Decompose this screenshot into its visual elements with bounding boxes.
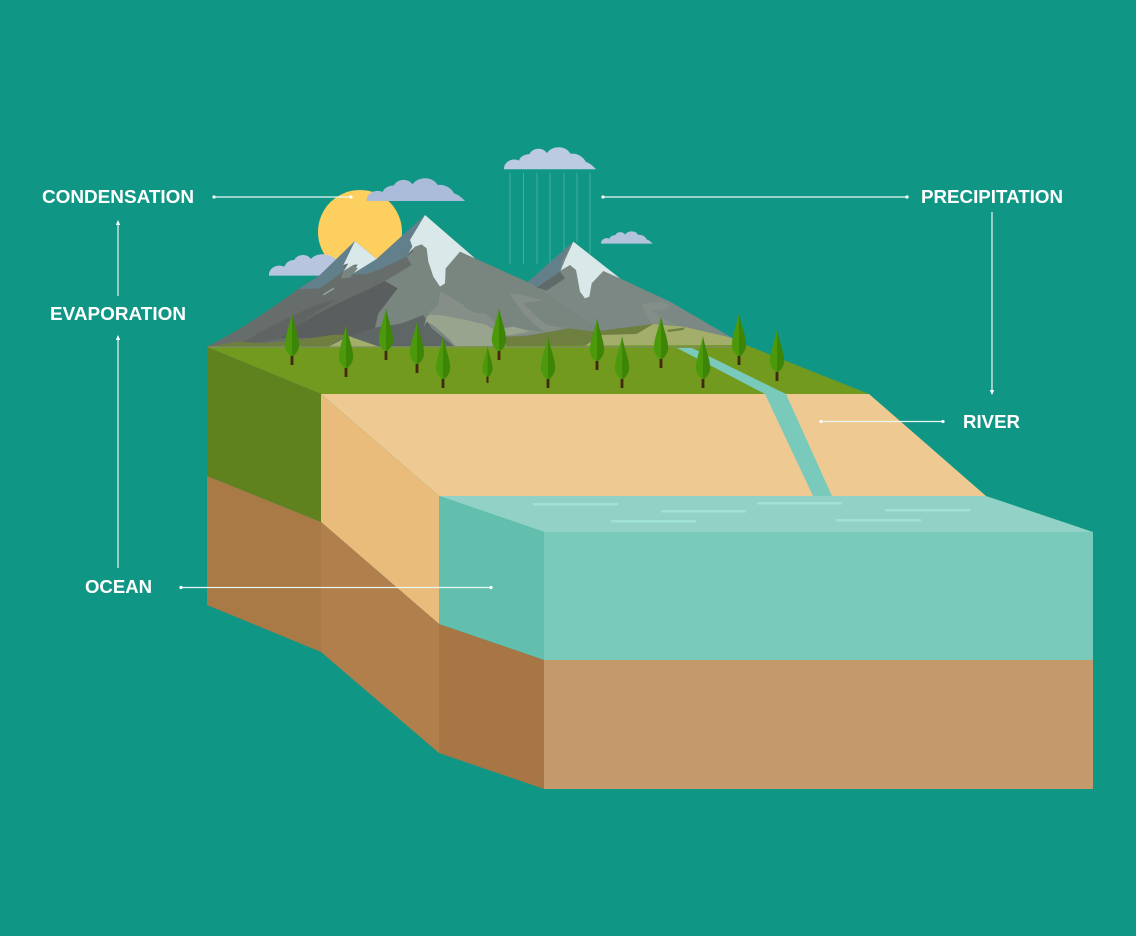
sand top bbox=[321, 394, 986, 496]
soil front face bbox=[544, 660, 1093, 789]
mountain: lighter slopes bbox=[424, 292, 567, 347]
sun bbox=[318, 190, 402, 274]
water front face bbox=[544, 532, 1093, 660]
soil lower left face bbox=[439, 624, 544, 789]
trees bbox=[285, 308, 784, 388]
grass top bbox=[207, 345, 869, 394]
soil left face bbox=[207, 476, 321, 652]
label: evaporation: EVAPORATION bbox=[50, 304, 186, 324]
cloud: small right bbox=[601, 231, 653, 244]
label: ocean: OCEAN bbox=[85, 577, 152, 597]
grass horizon line bbox=[207, 346, 735, 348]
soil middle face bbox=[321, 522, 439, 753]
rain lines bbox=[510, 173, 590, 264]
leader line: condensation bbox=[212, 195, 353, 199]
grass left face bbox=[207, 347, 321, 522]
mountain: back right bbox=[520, 242, 747, 347]
mountain: main massif bbox=[207, 215, 618, 347]
label: condensation: CONDENSATION bbox=[42, 187, 194, 207]
cloud: near sun bbox=[367, 178, 465, 201]
foothills bbox=[212, 324, 750, 347]
cloud: rain cloud bbox=[504, 147, 596, 169]
label: river: RIVER bbox=[963, 412, 1020, 432]
label: precipitation: PRECIPITATION bbox=[921, 187, 1063, 207]
arrow: evaporation to condensation bbox=[116, 220, 120, 296]
leader line: ocean bbox=[179, 586, 493, 589]
water ripples bbox=[533, 502, 970, 522]
leader line: river bbox=[819, 420, 945, 423]
arrow: precipitation to river bbox=[990, 212, 994, 395]
cloud: left behind mountain bbox=[269, 254, 338, 276]
river bbox=[677, 348, 832, 496]
sand side face bbox=[321, 394, 439, 624]
water left face bbox=[439, 496, 544, 660]
leader line: precipitation bbox=[601, 195, 909, 199]
water top bbox=[439, 496, 1093, 532]
arrow: ocean to evaporation bbox=[116, 335, 120, 568]
